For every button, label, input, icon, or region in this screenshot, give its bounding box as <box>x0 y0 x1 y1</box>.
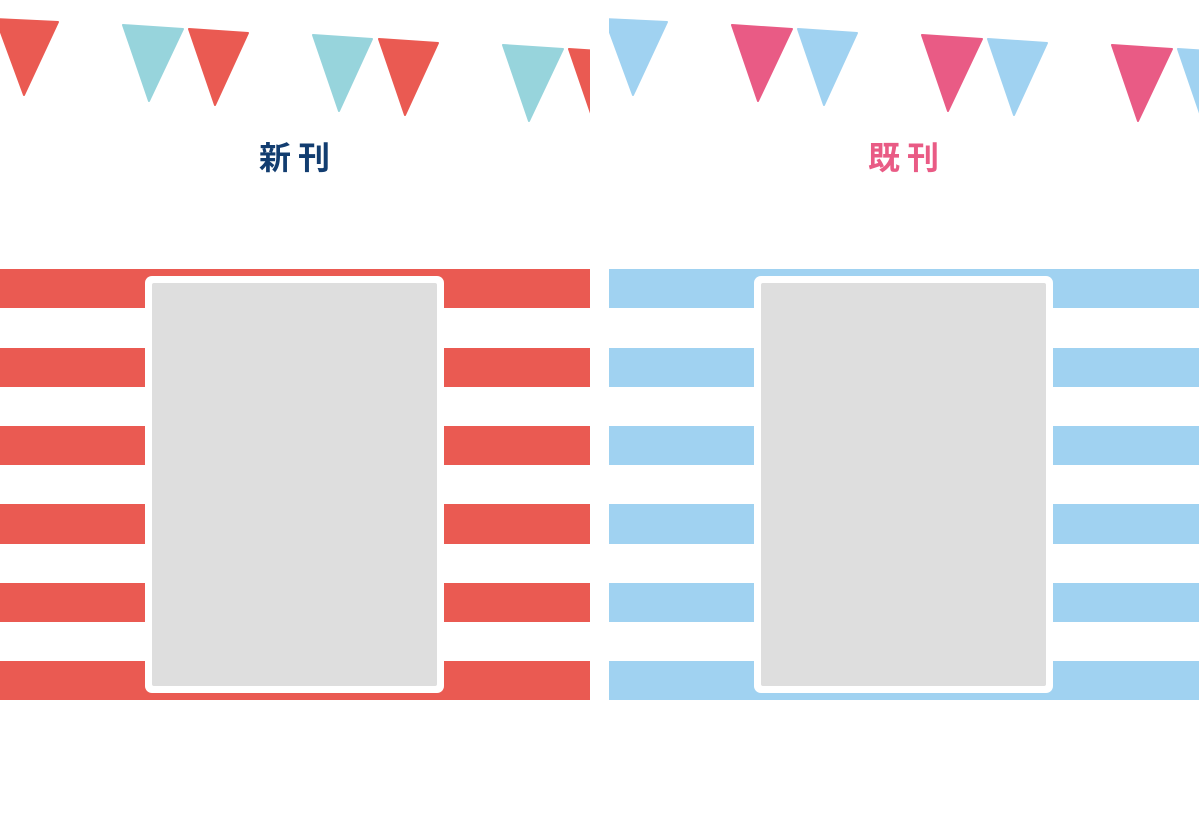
card: backlist cover placeholder <box>754 276 1053 693</box>
panel: backlist <box>605 19 1199 700</box>
striped background: blue <box>609 269 1199 700</box>
panel: new releases <box>0 19 629 700</box>
heading: 新刊: 新刊 <box>259 140 337 176</box>
card: new release cover placeholder <box>145 276 444 693</box>
bunting flags: new releases <box>0 19 629 125</box>
striped background: red <box>0 269 590 700</box>
bunting flags: backlist <box>605 19 1199 125</box>
heading: 既刊: 既刊 <box>868 140 946 176</box>
